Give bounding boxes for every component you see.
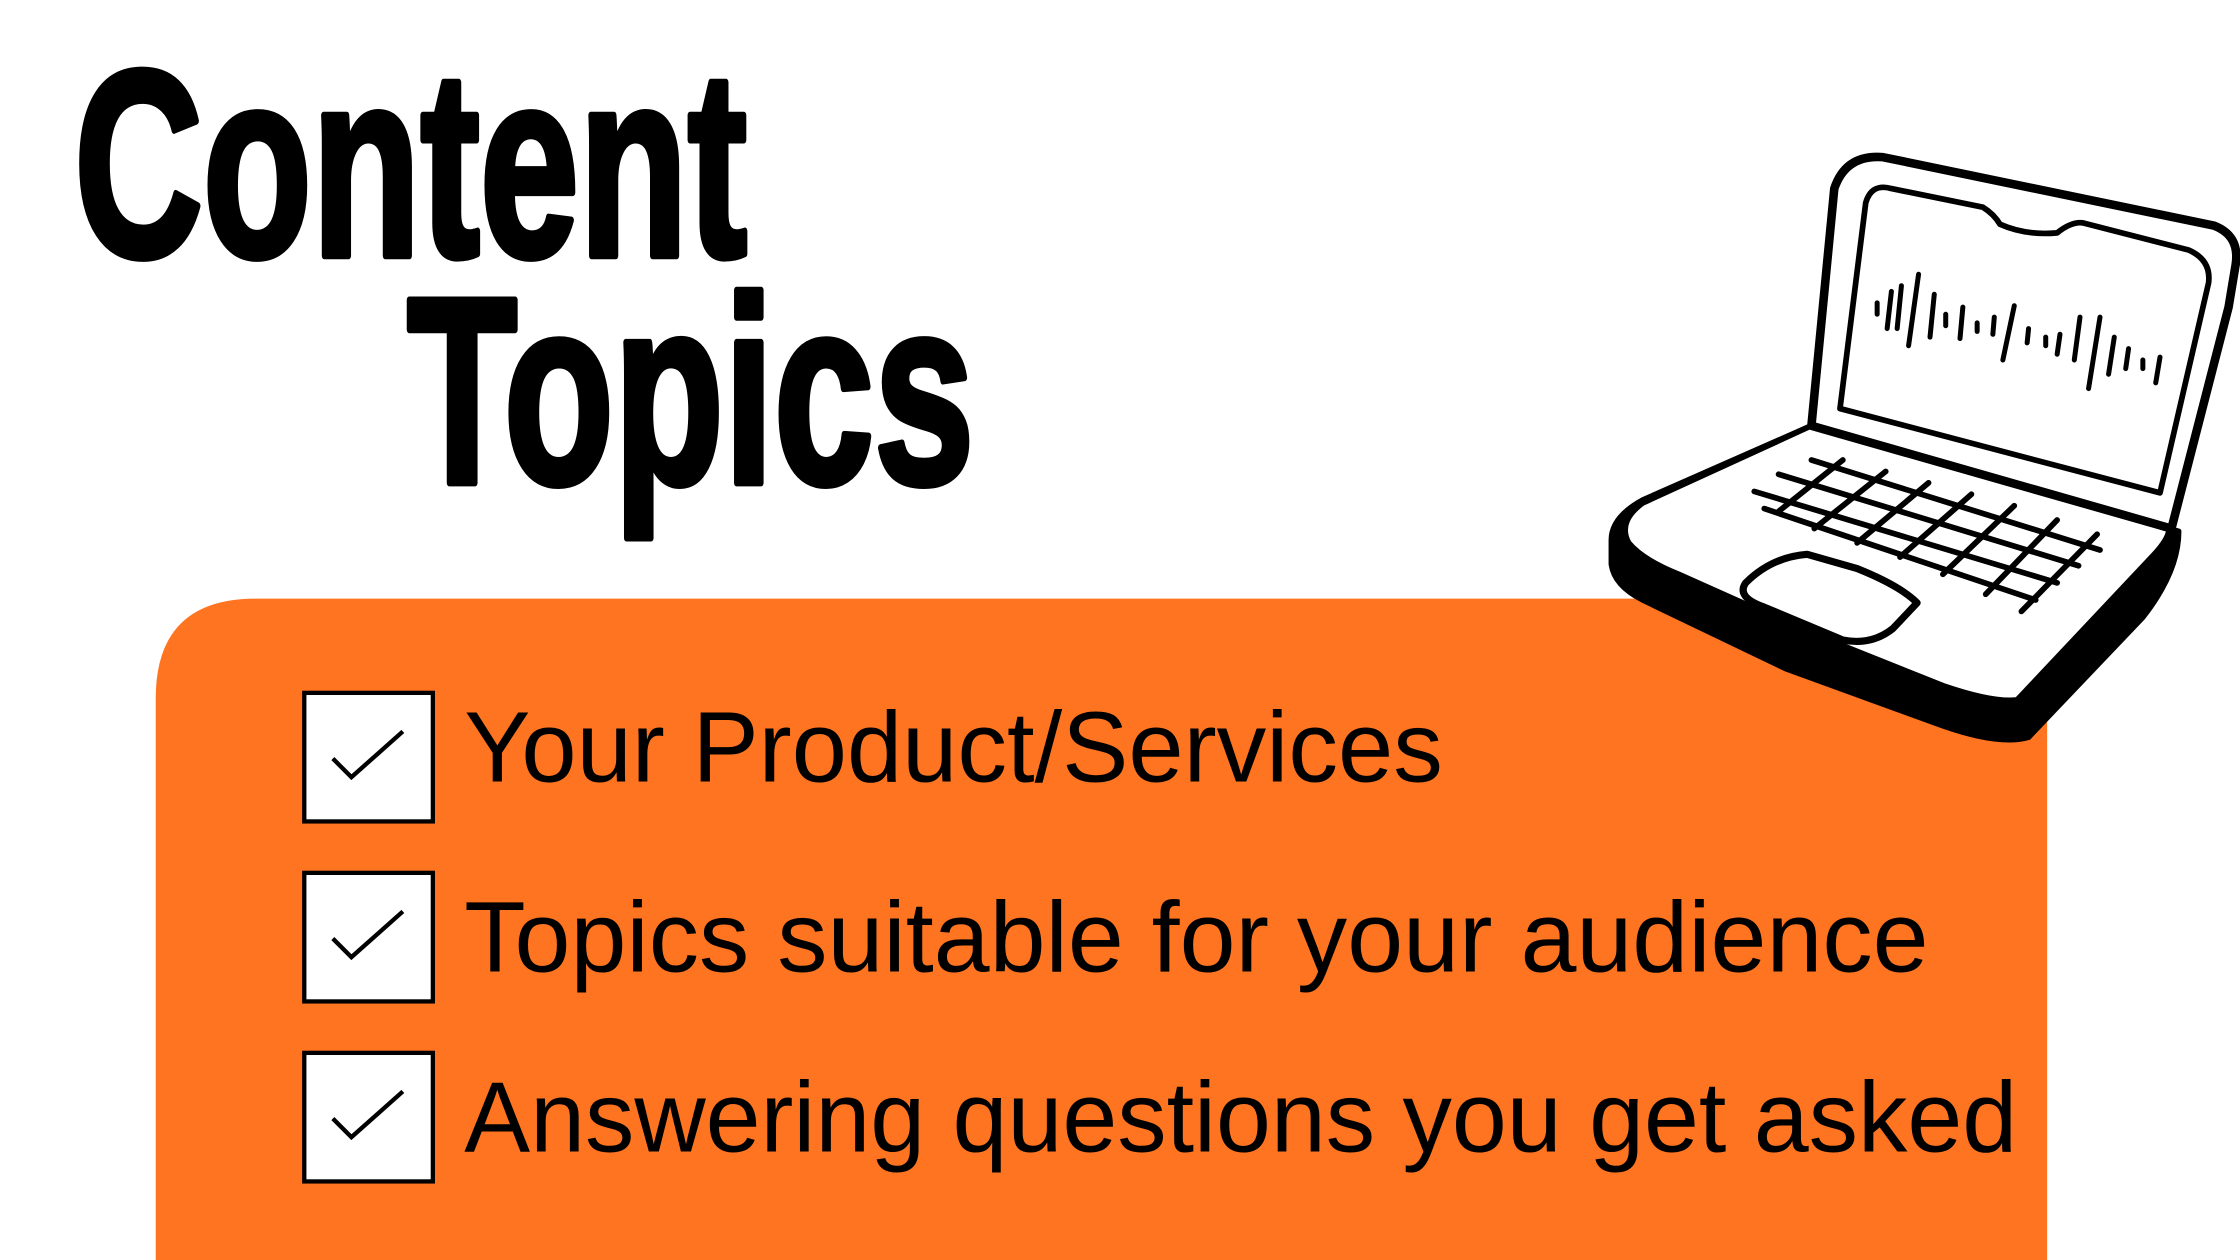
- title: Topics: [407, 243, 974, 541]
- panel: orange checklist: [156, 599, 2047, 1260]
- checklist item 2: Topics suitable for your audience: [464, 881, 1929, 993]
- laptop lid: [1811, 157, 2236, 529]
- title: [74, 16, 974, 541]
- keyboard: [1754, 460, 2100, 611]
- trackpad: [1743, 554, 1917, 641]
- checklist item 1: Your Product/Services: [464, 691, 1443, 803]
- screen: [1840, 187, 2209, 493]
- laptop base: [1611, 426, 2179, 740]
- title: Content: [74, 16, 747, 313]
- checklist item 3: Answering questions you get asked: [464, 1061, 2017, 1173]
- waveform: [1877, 274, 2160, 389]
- icon: laptop: [1611, 157, 2236, 740]
